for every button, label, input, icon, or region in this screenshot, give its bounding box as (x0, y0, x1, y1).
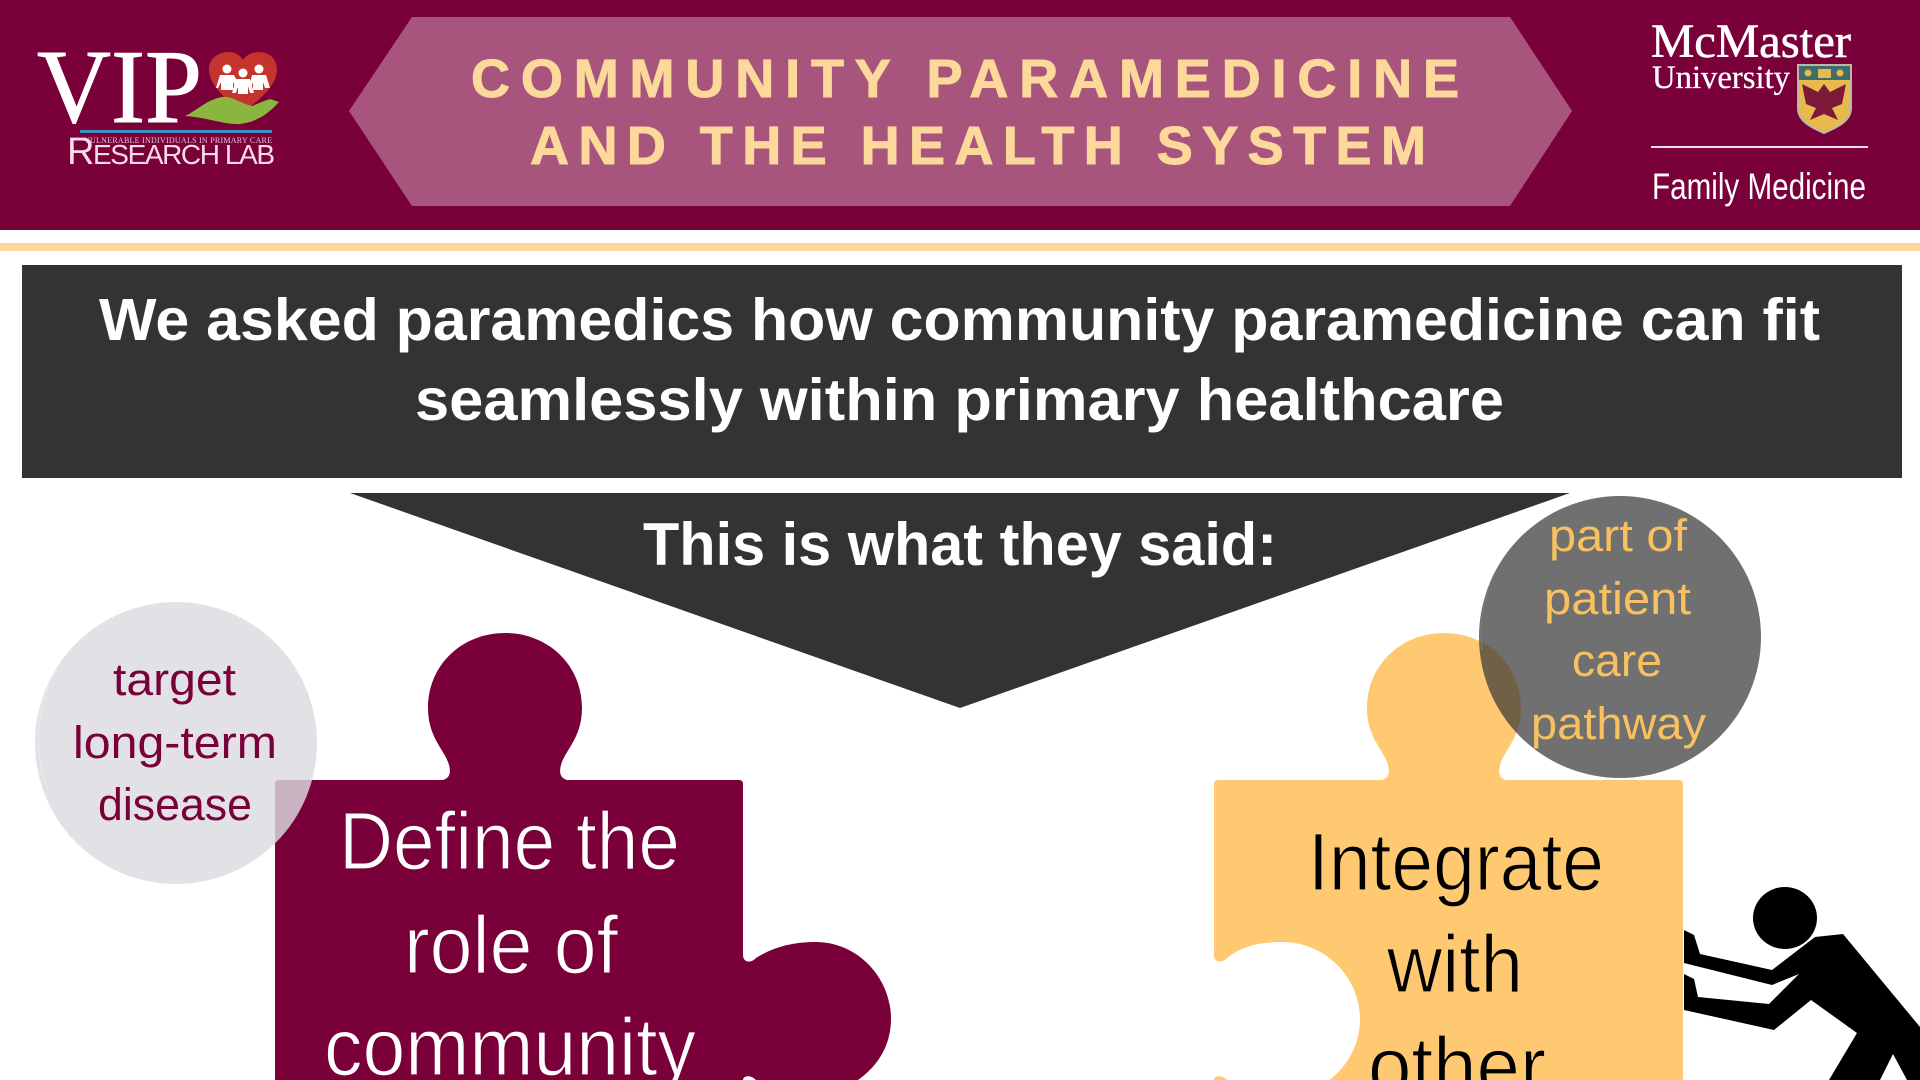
icon: McMaster shield (1798, 65, 1851, 133)
puzzle piece: integrate with other (1214, 633, 1683, 1080)
title banner: COMMUNITY PARAMEDICINE (471, 49, 1459, 109)
callout: part of patient care pathway: care (1572, 635, 1662, 686)
callout: target long-term disease (35, 602, 317, 884)
callout: target long-term disease: long-term (73, 717, 277, 768)
McMaster University Family Medicine logo: University (1652, 60, 1790, 96)
callout: part of patient care pathway: patient (1544, 573, 1692, 624)
question panel: seamlessly within primary healthcare (415, 367, 1504, 433)
McMaster University Family Medicine logo: Family Medicine (1652, 166, 1866, 207)
callout: target long-term disease: disease (98, 779, 252, 830)
puzzle piece: define the role (275, 633, 891, 1080)
question panel (22, 265, 1902, 478)
header band (0, 0, 1920, 251)
VIP Research Lab logo (37, 28, 279, 173)
puzzle piece: define the role: role of (404, 900, 618, 991)
down arrow with lead-in text (350, 493, 1570, 708)
icon: person pushing puzzle piece (1684, 887, 1920, 1080)
callout: part of patient care pathway: pathway (1531, 698, 1707, 749)
callout: part of patient care pathway (1479, 496, 1761, 778)
title banner: AND THE HEALTH SYSTEM (530, 116, 1426, 176)
icon: heart with three people (185, 52, 279, 124)
McMaster University Family Medicine logo (1651, 15, 1868, 207)
VIP Research Lab logo: RESEARCH LAB (67, 131, 275, 173)
VIP Research Lab logo: VIP (37, 28, 202, 145)
question panel: We asked paramedics how community paramedicine can fit (99, 287, 1820, 353)
puzzle piece: define the role: Define the (339, 796, 680, 887)
callout: part of patient care pathway: part of (1549, 510, 1688, 561)
VIP Research Lab logo: VULNERABLE INDIVIDUALS IN PRIMARY CARE (84, 136, 272, 145)
title banner (349, 17, 1572, 206)
down arrow with lead-in text: This is what they said: (643, 511, 1277, 578)
McMaster University Family Medicine logo: McMaster (1651, 15, 1851, 68)
puzzle piece: integrate with other: with (1386, 919, 1523, 1010)
callout: target long-term disease: target (113, 654, 237, 705)
puzzle piece: integrate with other: Integrate (1308, 817, 1604, 908)
